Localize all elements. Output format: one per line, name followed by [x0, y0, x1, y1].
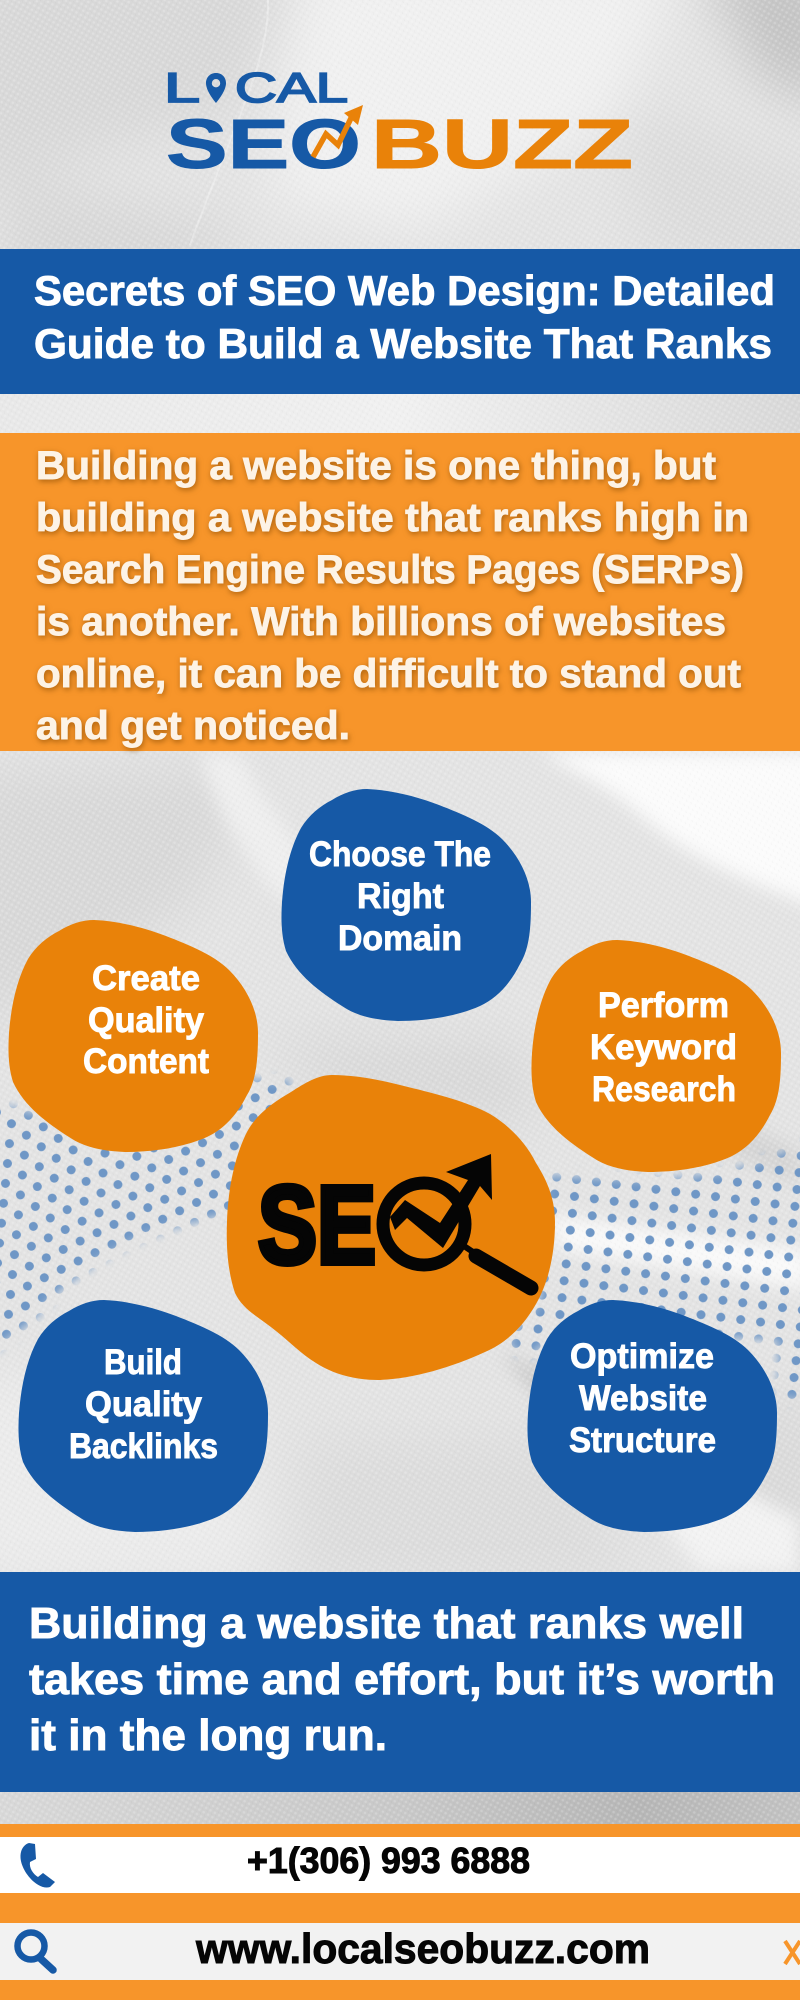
step: create quality content: Content — [83, 1042, 209, 1081]
icon: location pin — [206, 73, 226, 103]
step: perform keyword research: Keyword — [590, 1028, 737, 1067]
intro text: Search Engine Results Pages (SERPs) — [36, 548, 744, 592]
intro text: is another. With billions of websites — [36, 600, 726, 644]
step: create quality content — [8, 920, 258, 1152]
closing text: it in the long run. — [29, 1711, 387, 1760]
step: optimize website structure: Optimize — [570, 1337, 714, 1376]
halftone dots right — [512, 1138, 800, 1399]
icon: phone — [20, 1843, 55, 1888]
step: build quality backlinks: Backlinks — [69, 1427, 218, 1466]
step: optimize website structure — [527, 1300, 777, 1532]
footer orange background — [0, 1824, 800, 2000]
intro text: online, it can be difficult to stand out — [36, 652, 741, 696]
logo word SEO: SEO — [166, 105, 361, 183]
website bar — [0, 1923, 800, 1980]
closing text: Building a website that ranks well — [29, 1599, 744, 1648]
logo word BUZZ: BUZZ — [371, 105, 633, 183]
step: build quality backlinks: Build — [104, 1343, 182, 1382]
step: perform keyword research: Research — [592, 1070, 736, 1109]
title text: Secrets of SEO Web Design: Detailed — [34, 267, 775, 314]
step: choose the right domain: Right — [357, 877, 444, 916]
title text: Guide to Build a Website That Ranks — [34, 320, 772, 367]
step: create quality content: Create — [92, 959, 200, 998]
step: choose the right domain: Domain — [338, 919, 462, 958]
logo word LOCAL — [164, 64, 348, 111]
intro text — [36, 444, 749, 748]
closing panel — [0, 1572, 800, 1792]
step: optimize website structure: Structure — [569, 1421, 716, 1460]
intro text: Building a website is one thing, but — [36, 444, 716, 488]
icon: logo growth arrow — [313, 105, 363, 157]
icon: magnifier with growth arrow — [383, 1154, 531, 1288]
closing text: takes time and effort, but it’s worth — [29, 1655, 775, 1704]
seo mark: SE — [258, 1164, 376, 1287]
step: choose the right domain — [281, 789, 531, 1021]
halftone dots left — [0, 1072, 294, 1355]
phone number: +1(306) 993 6888 — [247, 1840, 530, 1881]
step: perform keyword research — [531, 940, 781, 1172]
logo word LOCAL: CAL — [235, 64, 348, 111]
phone bar — [0, 1837, 800, 1893]
intro text: and get noticed. — [36, 704, 350, 748]
website url: www.localseobuzz.com — [195, 1925, 650, 1972]
icon: search — [18, 1932, 53, 1970]
title panel — [0, 249, 800, 394]
central seo badge — [227, 1075, 555, 1380]
step: create quality content: Quality — [88, 1001, 205, 1040]
intro panel — [0, 433, 800, 751]
logo word LOCAL: L — [164, 64, 200, 111]
step: optimize website structure: Website — [579, 1379, 707, 1418]
title text — [34, 267, 775, 367]
step: choose the right domain: Choose The — [309, 835, 491, 874]
seo mark — [258, 1154, 531, 1288]
logo — [164, 64, 633, 183]
closing text — [29, 1599, 775, 1760]
step: build quality backlinks: Quality — [85, 1385, 203, 1424]
intro text: building a website that ranks high in — [36, 496, 749, 540]
icon: close mark — [785, 1941, 800, 1964]
step: perform keyword research: Perform — [598, 986, 729, 1025]
step: build quality backlinks — [18, 1300, 268, 1532]
